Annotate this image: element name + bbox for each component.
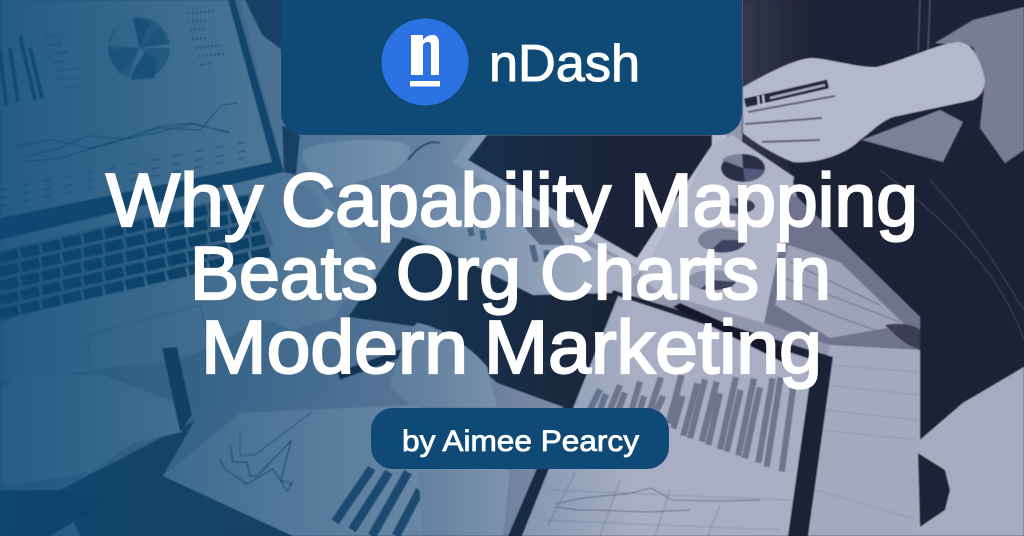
screen bar chart	[0, 36, 42, 105]
floor	[915, 367, 1024, 536]
logo card	[281, 0, 742, 135]
laptop screen	[0, 0, 284, 240]
title: Beats	[190, 231, 378, 315]
author pill	[371, 408, 669, 469]
title: Org	[396, 231, 521, 315]
forearm	[180, 320, 336, 410]
rolled sleeve	[935, 7, 1024, 163]
shirt seam	[918, 0, 930, 52]
keyboard	[0, 192, 274, 322]
writing hand	[390, 323, 497, 407]
title: Marketing	[484, 305, 822, 389]
hand and forearm holding pen	[743, 42, 985, 162]
title: Mapping	[630, 158, 918, 242]
laptop base	[0, 172, 345, 380]
small bars on paper	[470, 228, 548, 266]
desk items at top left	[245, 0, 282, 50]
pen	[745, 84, 828, 106]
author pill: by Aimee Pearcy	[402, 425, 639, 458]
title: Capability	[281, 158, 611, 242]
title: in	[773, 231, 831, 315]
dark table edge	[60, 420, 293, 536]
hand on tablet	[522, 203, 565, 245]
leg highlights	[880, 170, 1024, 340]
paper below tablet	[402, 185, 643, 295]
title	[106, 158, 918, 389]
screen line chart	[16, 103, 238, 162]
clipboard	[508, 290, 833, 536]
screen pie chart	[107, 17, 171, 80]
watch strap	[162, 347, 192, 432]
jeans and shirt	[742, 0, 1024, 180]
title: Why	[106, 158, 264, 242]
bar chart on clipboard	[590, 375, 793, 472]
title: Modern	[201, 305, 468, 389]
trackpad	[88, 305, 212, 372]
title: Charts	[540, 231, 759, 315]
lower hand	[418, 470, 510, 536]
logo wordmark: nDash	[489, 35, 640, 93]
shoe	[918, 453, 950, 527]
paper with pie charts	[640, 135, 794, 323]
screen legends	[46, 11, 225, 88]
line chart on clipboard	[540, 473, 790, 536]
left arm sleeve	[0, 375, 182, 487]
left paper with chart	[163, 405, 505, 536]
finger shadows	[745, 96, 835, 142]
jeans leg	[785, 128, 1024, 440]
logo icon: n in blue circle	[382, 18, 468, 106]
right-hand pen	[337, 326, 469, 380]
white tablet frame	[452, 135, 735, 270]
dark lower tablet	[348, 237, 613, 407]
laptop-side hand	[285, 175, 372, 300]
dark upper tablet	[468, 135, 712, 258]
mouse	[302, 140, 410, 188]
screen table text	[0, 142, 255, 206]
wood grain right	[764, 177, 920, 350]
cuff	[862, 110, 963, 162]
paper bar strokes	[335, 468, 420, 536]
